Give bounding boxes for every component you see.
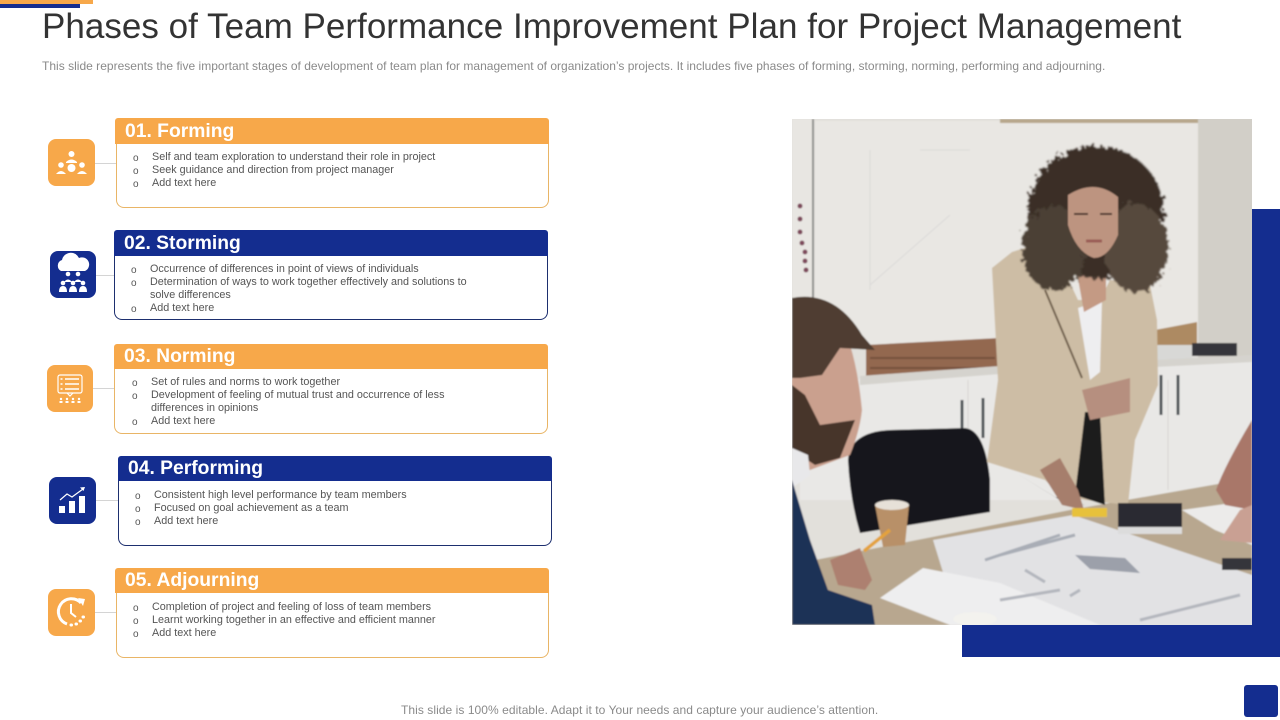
bullet list: o (132, 417, 138, 428)
card body (116, 138, 549, 208)
card heading (118, 456, 552, 481)
card body (118, 476, 552, 546)
card: 01 Forming (115, 118, 549, 208)
bullet list: o (133, 603, 139, 614)
bullet list: solve differences (150, 289, 231, 301)
bullet list (133, 601, 436, 640)
bullet list (133, 151, 436, 190)
bullet list: Set of rules and norms to work together (151, 376, 340, 388)
connector: storming (95, 275, 115, 276)
card heading: 05. Adjourning (125, 570, 259, 591)
card heading (115, 118, 549, 144)
icon: norming rules board (47, 365, 93, 412)
icon: adjourning clock (48, 589, 95, 636)
bullet list (132, 376, 444, 428)
photo: team meeting around a table (792, 119, 1252, 625)
bullet list: differences in opinions (151, 402, 258, 414)
blue backing block behind photo (962, 209, 1280, 657)
connector: performing (95, 500, 118, 501)
icon: forming team gear (48, 139, 95, 186)
card heading (114, 230, 548, 256)
card heading: 01. Forming (125, 121, 234, 142)
card heading (114, 344, 548, 369)
bullet list: o (135, 504, 141, 515)
bottom-right navy square (1244, 685, 1278, 717)
card body (114, 250, 548, 320)
bullet list: o (135, 517, 141, 528)
card heading: 03. Norming (124, 346, 235, 367)
connector: forming (95, 163, 116, 164)
bullet list: Add text here (154, 515, 218, 527)
icon: performing growth chart (49, 477, 96, 524)
footer note: This slide is 100% editable. Adapt it to Your needs and capture your audience’s attention. (401, 703, 878, 717)
bullet list: Consistent high level performance by team members (154, 489, 407, 501)
icon: storming cloud and team (50, 251, 96, 298)
card: 04 Performing (118, 456, 552, 546)
card body (114, 364, 548, 434)
bullet list: Development of feeling of mutual trust and occurrence of less (151, 389, 444, 401)
card: 05 Adjourning (115, 568, 549, 658)
bullet list: Determination of ways to work together effectively and solutions to (150, 276, 467, 288)
card: 03 Norming (114, 344, 548, 434)
bullet list: Occurrence of differences in point of views of individuals (150, 263, 419, 275)
bullet list: o (133, 616, 139, 627)
card body (116, 588, 549, 658)
bullet list: o (132, 391, 138, 402)
card heading: 04. Performing (128, 458, 263, 479)
bullet list: o (131, 304, 137, 315)
bullet list: Completion of project and feeling of loss of team members (152, 601, 431, 613)
bullet list: Seek guidance and direction from project manager (152, 164, 394, 176)
bullet list: o (133, 166, 139, 177)
bullet list: o (135, 491, 141, 502)
bullet list: Focused on goal achievement as a team (154, 502, 348, 514)
connector: norming (93, 388, 114, 389)
bullet list: o (133, 629, 139, 640)
card: 02 Storming (114, 230, 548, 320)
bullet list: Add text here (152, 177, 216, 189)
bullet list: Add text here (152, 627, 216, 639)
bullet list: Self and team exploration to understand their role in project (152, 151, 435, 163)
top accent bars (0, 0, 93, 8)
bullet list: o (131, 278, 137, 289)
bullet list (135, 489, 407, 528)
title: Phases of Team Performance Improvement Plan for Project Management (42, 7, 1181, 46)
bullet list: Add text here (150, 302, 214, 314)
bullet list: o (133, 153, 139, 164)
bullet list (131, 263, 467, 315)
bullet list: Learnt working together in an effective and efficient manner (152, 614, 436, 626)
card heading: 02. Storming (124, 233, 241, 254)
bullet list: o (131, 265, 137, 276)
subtitle: This slide represents the five important stages of development of team plan for management of organization’s projects. It includes five phases of forming, storming, norming, performing and adjourning. (42, 59, 1105, 73)
bullet list: o (133, 179, 139, 190)
bullet list: Add text here (151, 415, 215, 427)
connector: adjourning (95, 612, 116, 613)
card heading (115, 568, 549, 593)
bullet list: o (132, 378, 138, 389)
